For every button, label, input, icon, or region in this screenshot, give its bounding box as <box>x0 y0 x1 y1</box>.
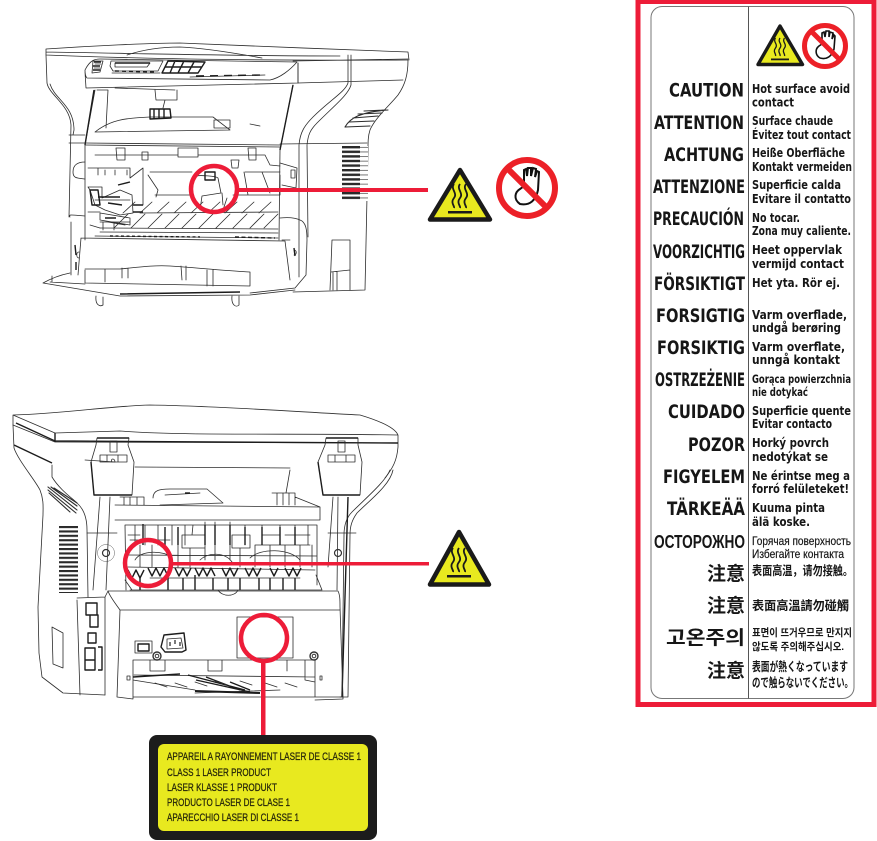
caution headings column: ATTENZIONE <box>653 177 745 198</box>
caution headings column: PRECAUCIÓN <box>653 208 744 230</box>
paper guide hatching <box>95 202 278 238</box>
scanner lid rear <box>13 405 398 478</box>
translated warnings column: Varm overflade, <box>752 307 847 322</box>
translated warnings column: forró felületeket! <box>752 481 849 496</box>
laser label text: CLASS 1 LASER PRODUCT <box>167 767 271 779</box>
caution headings column: CAUTION <box>669 80 744 102</box>
translated warnings column: Evitare il contatto <box>752 191 851 206</box>
caution headings column: 注意 <box>707 562 745 585</box>
translated warnings column: Varm overflate, <box>752 339 845 354</box>
caution headings column: TÄRKEÄÄ <box>667 498 746 520</box>
rear view of printer <box>13 405 398 700</box>
translated warnings column: Горячая поверхность <box>752 534 851 548</box>
caution headings column: 注意 <box>707 659 745 682</box>
laser label text: APARECCHIO LASER DI CLASSE 1 <box>167 812 299 824</box>
paper opening <box>85 85 293 240</box>
icon: do not touch <box>804 26 846 66</box>
rear body outline <box>13 425 393 697</box>
rear side vents <box>59 526 78 593</box>
translated warnings column: Evitar contacto <box>752 416 832 431</box>
caution headings column: ATTENTION <box>654 113 744 134</box>
screws <box>98 544 342 660</box>
scanner lid <box>46 43 409 61</box>
hot surface warning triangle (front) <box>430 170 490 220</box>
caution headings column: CUIDADO <box>668 402 745 423</box>
laser label text <box>167 751 361 824</box>
translated warnings column: Kuuma pinta <box>752 500 825 515</box>
translated warnings column: Избегайте контакта <box>752 547 844 561</box>
translated warnings column: Horký povrch <box>752 435 829 450</box>
callout circle <box>191 166 237 212</box>
paper stop and upper rear cover <box>115 470 320 520</box>
laser label text: LASER KLASSE 1 PRODUKT <box>167 782 277 794</box>
no touch sign (front) <box>499 160 555 216</box>
callout circle: rear fuser <box>125 540 171 586</box>
power switch <box>135 641 152 653</box>
caution headings column: FÖRSIKTIGT <box>654 273 745 295</box>
laser label text: PRODUCTO LASER DE CLASE 1 <box>167 797 290 809</box>
translated warnings column: undgå berøring <box>752 320 841 335</box>
fuser assembly <box>125 522 322 595</box>
printer body outline <box>46 55 408 292</box>
leader line: front hot surface <box>238 188 428 192</box>
leader line: rear hot surface <box>171 562 429 566</box>
translated warnings column: 표면이 뜨거우므로 만지지 <box>752 626 852 639</box>
caution headings column: FORSIGTIG <box>656 306 745 327</box>
translated warnings column: unngå kontakt <box>752 352 840 367</box>
translated warnings column: Surface chaude <box>752 113 833 128</box>
translated warnings column <box>752 81 853 690</box>
caution headings column: POZOR <box>688 435 745 456</box>
rear connectors <box>52 591 108 695</box>
translated warnings column: älä koske. <box>752 514 810 529</box>
caution headings column: 注意 <box>707 594 745 617</box>
translated warnings column: nedotýkat se <box>752 449 828 464</box>
side handles <box>73 162 297 188</box>
caution headings column: FIGYELEM <box>663 467 745 488</box>
caution headings column: 고온주의 <box>666 627 745 649</box>
translated warnings column: vermijd contact <box>752 256 844 271</box>
caution headings column: VOORZICHTIG <box>653 242 745 263</box>
panel: multilingual caution label <box>638 2 874 704</box>
translated warnings column: nie dotykać <box>752 385 808 399</box>
rear hinges <box>91 438 362 495</box>
laser label area on rear <box>237 617 293 658</box>
translated warnings column: 않도록 주의해주십시오. <box>752 640 844 653</box>
left mechanism <box>88 168 143 230</box>
power socket <box>161 633 186 652</box>
front door and output tray <box>43 215 307 296</box>
front view of printer <box>43 43 409 306</box>
translated warnings column: Superficie quente <box>752 403 851 418</box>
laser class label <box>149 735 377 840</box>
caution headings column: FORSIKTIG <box>657 338 745 359</box>
fuser interior <box>148 172 280 197</box>
translated warnings column: 表面高溫請勿碰觸 <box>752 598 849 613</box>
leader line: laser label <box>261 661 266 736</box>
hot surface warning triangle (rear) <box>430 532 489 584</box>
translated warnings column: Heiße Oberfläche <box>752 145 845 160</box>
translated warnings column: Ne érintse meg a <box>752 468 850 483</box>
side vents <box>342 146 368 201</box>
translated warnings column: Superficie calda <box>752 177 841 192</box>
control panel <box>85 59 298 88</box>
caution headings column: OSTRZEŻENIE <box>655 369 745 391</box>
callout circle: laser label <box>241 615 287 661</box>
translated warnings column: contact <box>752 94 794 110</box>
caution headings column <box>653 80 746 682</box>
laser label text: APPAREIL A RAYONNEMENT LASER DE CLASSE 1 <box>167 751 361 763</box>
icon: hot surface triangle <box>758 26 802 64</box>
translated warnings column: 表面高温，请勿接触。 <box>752 563 853 578</box>
translated warnings column: Het yta. Rör ej. <box>752 275 840 290</box>
lower rear cover <box>108 591 343 700</box>
caution headings column: ОСТОРОЖНО <box>654 532 745 552</box>
translated warnings column: Hot surface avoid <box>752 81 850 96</box>
translated warnings column: No tocar. <box>752 210 800 225</box>
caution headings column: ACHTUNG <box>664 145 744 166</box>
translated warnings column: Heet oppervlak <box>752 242 843 257</box>
